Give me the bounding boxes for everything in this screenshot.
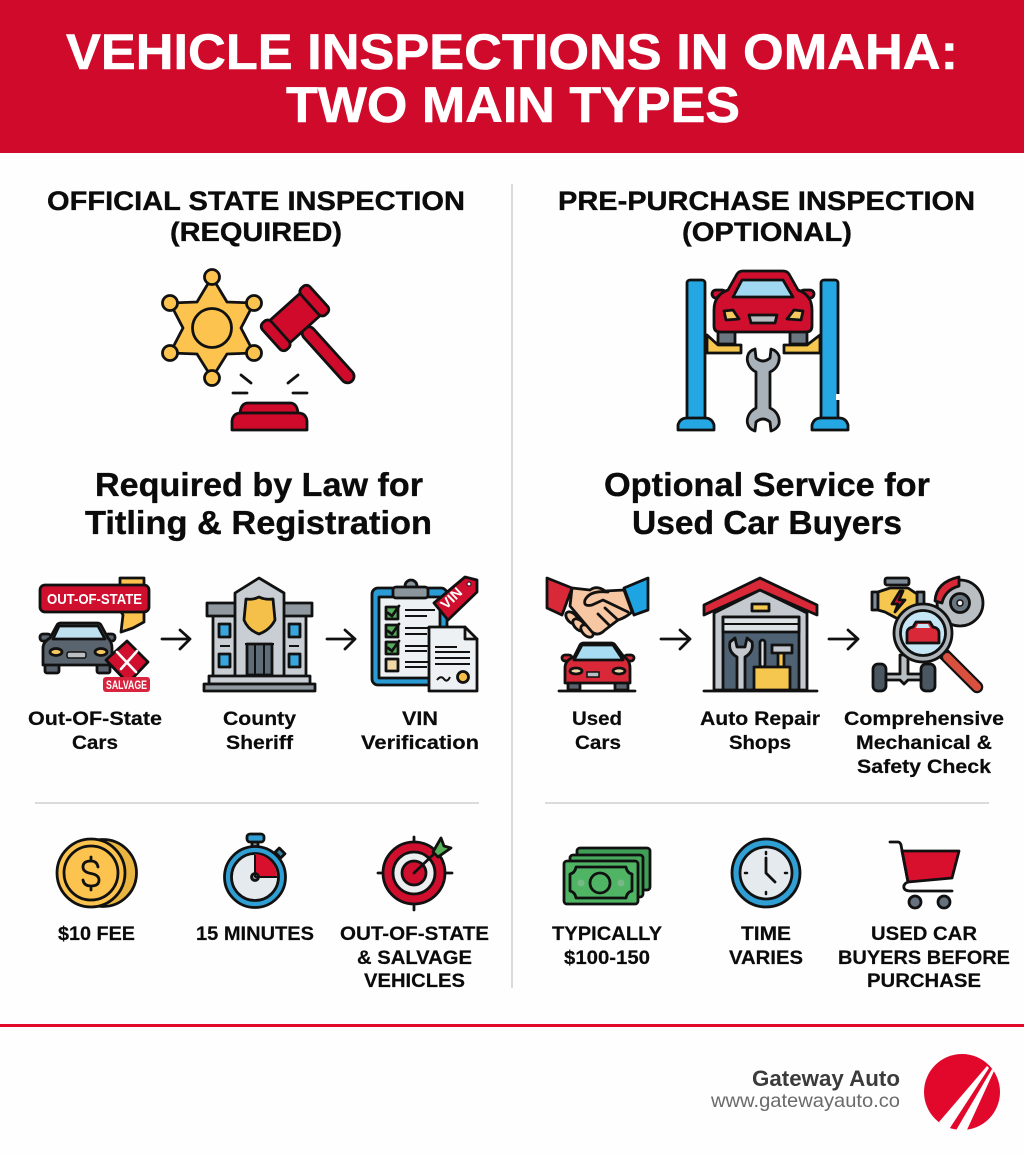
label: used car buyers before purchase: BUYERS BEFORE [838,947,1010,969]
label: typically $100-150: $100-150 [564,947,650,969]
label: county sheriff [223,708,296,754]
arrow: repair shops to check [829,630,858,649]
title: VEHICLE INSPECTIONS IN OMAHA: [66,24,958,80]
heading: pre-purchase inspection: PRE-PURCHASE INSPECTION [558,186,975,216]
logo [924,1054,1000,1132]
icon: auto repair garage [704,578,817,691]
label: used cars: Used [572,708,622,730]
icon: shopping cart [890,842,959,908]
subheading: optional service: Optional Service for [604,466,930,503]
label: out-of-state cars [28,708,162,754]
icon: coin fee [57,839,136,907]
icon: cash stack [564,848,650,904]
icon: engine, brake and magnifier check [872,577,983,691]
label: used cars: Cars [575,732,621,754]
icon: target [378,837,452,910]
label: used cars [572,708,622,754]
label: out-of-state and salvage vehicles: & SALVAGE [357,947,472,969]
label: out-of-state cars: Out-OF-State [28,708,162,730]
label: county sheriff: County [223,708,296,730]
label: vin verification: Verification [361,732,479,754]
label: typically $100-150 [552,923,662,969]
brand name: Gateway Auto [752,1066,900,1091]
icon: out-of-state and salvage car: SALVAGE [106,680,147,692]
label: used car buyers before purchase [838,923,1010,992]
icon: gavel [232,283,376,430]
icon: county sheriff building [204,578,315,691]
icon: vin verification clipboard: VIN [437,584,465,612]
label: comprehensive check: Mechanical & [856,732,992,754]
label: out-of-state and salvage vehicles [340,923,489,992]
label: comprehensive check: Safety Check [857,756,991,778]
label: county sheriff: Sheriff [226,732,294,754]
label: vin verification [361,708,479,754]
label: comprehensive check: Comprehensive [844,708,1004,730]
label: time varies: VARIES [729,947,803,969]
icon: clock [732,839,800,907]
subheading: required by law: Titling & Registration [85,504,432,541]
icon: handshake over used car [547,578,648,691]
icon: stopwatch [224,834,286,908]
arrow: cars to sheriff [162,630,190,649]
heading: official state inspection [47,186,465,247]
heading: official state inspection: (REQUIRED) [170,217,342,247]
label: used car buyers before purchase: USED CAR [871,923,977,945]
label: auto repair shops [700,708,820,754]
icon: wrench [747,349,779,431]
label: auto repair shops: Auto Repair [700,708,820,730]
label: out-of-state and salvage vehicles: OUT-OF-STATE [340,923,489,945]
label: time varies: TIME [741,923,791,945]
label: typically $100-150: TYPICALLY [552,923,662,945]
subheading: required by law [85,466,432,541]
footer brand [710,1054,1000,1132]
label: out-of-state cars: Cars [72,732,118,754]
label: out-of-state and salvage vehicles: VEHICLES [364,970,465,992]
label: 15 minutes: 15 MINUTES [196,923,314,945]
icon: out-of-state and salvage car: OUT-OF-STATE [47,591,142,608]
heading: pre-purchase inspection: (OPTIONAL) [682,217,852,247]
icon: out-of-state and salvage car [40,578,150,692]
subheading: optional service: Used Car Buyers [632,504,902,541]
icon: car on lift [678,271,848,430]
subheading: required by law: Required by Law for [95,466,423,503]
heading: pre-purchase inspection [558,186,975,247]
panel: pre-purchase inspection [545,186,1010,992]
label: used car buyers before purchase: PURCHASE [867,970,981,992]
title [66,24,958,133]
label: $10 fee: $10 FEE [58,923,135,945]
icon: vin verification clipboard [372,577,477,691]
label: comprehensive check [844,708,1004,778]
label: time varies [729,923,803,969]
arrow: used cars to repair shops [661,630,690,649]
subheading: optional service [604,466,930,541]
heading: official state inspection: OFFICIAL STATE INSPECTION [47,186,465,216]
icon: sheriff star [162,270,262,386]
header banner [0,0,1024,153]
label: auto repair shops: Shops [729,732,791,754]
arrow: sheriff to vin [327,630,355,649]
label: vin verification: VIN [402,708,438,730]
title: TWO MAIN TYPES [286,77,740,133]
panel: official state inspection [28,186,489,992]
website: www.gatewayauto.co [710,1090,900,1112]
